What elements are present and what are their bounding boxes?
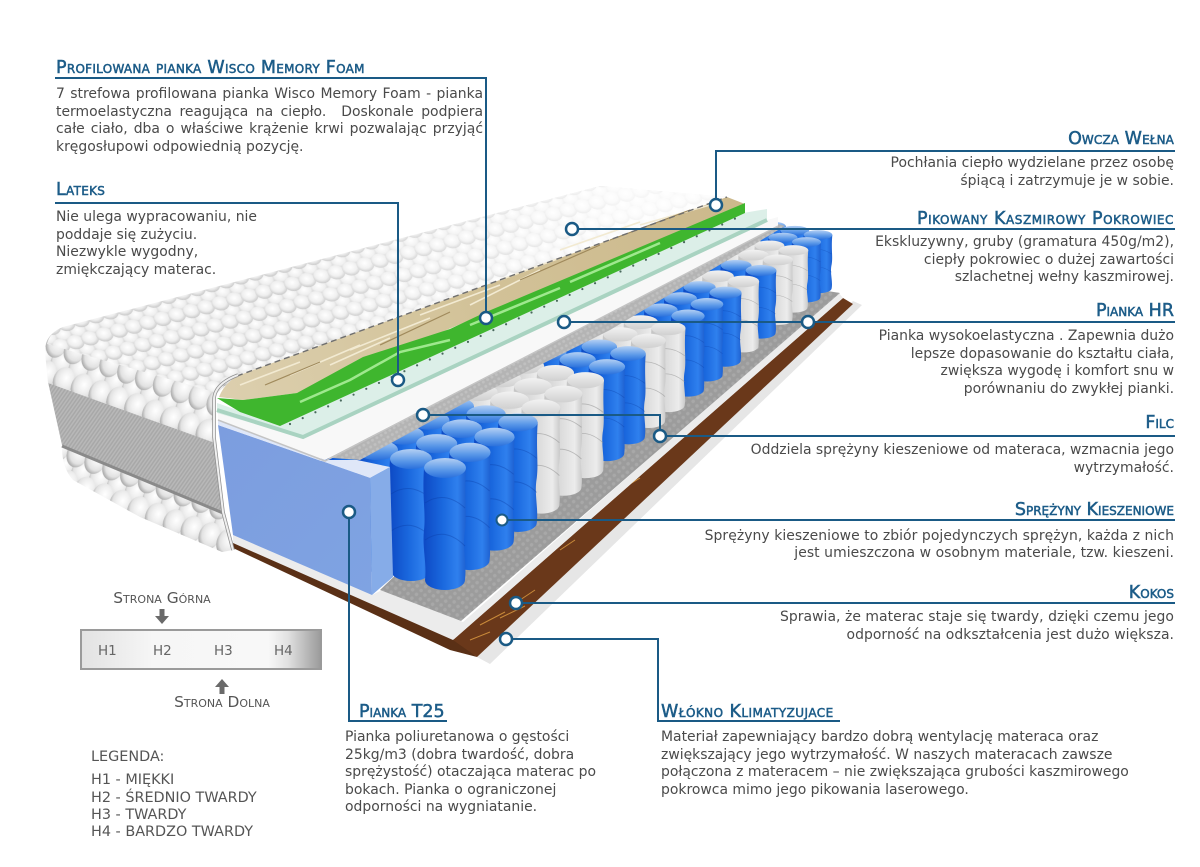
callout line: Profilowana pianka: [55, 78, 492, 324]
callout line: Pianka T25: [343, 506, 447, 721]
heading: Pianka HR: [1096, 301, 1174, 321]
description: pokrowca mimo jego pikowania laserowego.: [661, 782, 969, 798]
callout line: Filc: [417, 409, 1175, 442]
T25 foam: side face: [370, 467, 393, 595]
callout: Sprężyny Kieszeniowe: [705, 500, 1174, 561]
coconut layer: front lip: [233, 538, 477, 657]
legend entries: H4 - BARDZO TWARDY: [91, 824, 253, 840]
description: wytrzymałość.: [1074, 460, 1174, 476]
legend entries: H2 - ŚREDNIO TWARDY: [91, 790, 257, 806]
heading: Profilowana pianka Wisco Memory Foam: [56, 58, 365, 78]
description: jest umieszczona w osobnym materiale, tzw. kieszeni.: [794, 545, 1174, 561]
description: bokach. Pianka o ograniczonej: [345, 782, 556, 798]
legend title: LEGENDA:: [91, 749, 164, 765]
white fibre strip: [477, 301, 862, 664]
cover: quilted top surface: [47, 186, 727, 392]
heading: Sprężyny Kieszeniowe: [1015, 500, 1174, 520]
description: [345, 729, 596, 815]
grey knit base: [380, 289, 840, 621]
heading: Włókno Klimatyzujace: [661, 702, 834, 722]
heading: Pikowany Kaszmirowy Pokrowiec: [917, 209, 1174, 229]
cover: upper quilted side: [45, 327, 236, 443]
callout: Pianka HR: [879, 301, 1174, 397]
description: [780, 609, 1174, 643]
description: Pianka wysokoelastyczna . Zapewnia dużo: [879, 328, 1174, 344]
description: Sprawia, że materac staje się twardy, dzięki czemu jego: [780, 609, 1174, 625]
description: [879, 328, 1174, 397]
description: [891, 155, 1174, 189]
heading: Lateks: [56, 180, 105, 200]
H3: H3: [214, 643, 233, 659]
description: Nie ulega wypracowaniu, nie: [56, 209, 257, 225]
callout: Kokos: [780, 583, 1174, 643]
pocket springs: [321, 217, 832, 590]
description: porównaniu do zwykłej pianki.: [964, 381, 1174, 397]
description: [56, 86, 483, 155]
legend entries: H1 - MIĘKKI: [91, 772, 174, 788]
legend: [91, 749, 257, 840]
T25 foam: front face: [218, 425, 372, 595]
mattress illustration: [45, 186, 862, 664]
legend entries: H3 - TWARDY: [91, 807, 186, 823]
coconut layer: [453, 298, 853, 657]
description: termoelastyczna reagująca na ciepło. Doskonale podpiera: [56, 104, 483, 120]
callout line: Owcza Wełna: [710, 151, 1175, 211]
callout: Profilowana pianka Wisco Memory Foam: [56, 58, 483, 155]
H2: H2: [153, 643, 172, 659]
description: Oddziela sprężyny kieszeniowe od materaca, wzmacnia jego: [751, 442, 1174, 458]
description: [56, 209, 257, 278]
description: śpiącą i zatrzymuje je w sobie.: [960, 173, 1174, 189]
description: zmiękczający materac.: [56, 262, 216, 278]
description: lepsze dopasowanie do kształtu ciała,: [911, 346, 1174, 362]
white base strip: [233, 292, 843, 640]
arrow: bottom side: [215, 679, 229, 694]
description: 25kg/m3 (dobra twardość, dobra: [345, 747, 574, 763]
callout: Włókno Klimatyzujące: [661, 702, 1129, 798]
description: zwiększa wygodę i komfort snu w: [941, 363, 1174, 379]
label: Strona Dolna: Strona Dolna: [174, 693, 270, 711]
description: [705, 528, 1174, 561]
description: szlachetnej wełny kaszmirowej.: [955, 269, 1174, 285]
callout: Filc: [751, 413, 1174, 476]
description: 7 strefowa profilowana pianka Wisco Memory Foam - pianka: [56, 86, 483, 102]
top surface fade: [47, 186, 727, 392]
latex layer: [217, 209, 767, 438]
callout: Owcza Wełna: [891, 129, 1174, 189]
cover: lower quilted side: [62, 447, 233, 552]
callout: Pikowany Kaszmirowy Pokrowiec: [875, 209, 1174, 285]
callout line: Lateks: [55, 203, 404, 386]
callout line: Włókno Klimatyzujące: [500, 633, 840, 721]
description: Pianka poliuretanowa o gęstości: [345, 729, 569, 745]
heading: Owcza Wełna: [1068, 129, 1174, 149]
callout: Pianka T25: [345, 702, 596, 815]
callout line: Kokos: [510, 597, 1175, 609]
legend entries: [91, 772, 257, 840]
description: połączona z materacem – nie zwiększająca grubości kaszmirowego: [661, 764, 1129, 780]
H4: H4: [274, 643, 293, 659]
description: Materiał zapewniający bardzo dobrą wentylację materaca oraz: [661, 729, 1098, 745]
H1: H1: [98, 643, 117, 659]
firmness labels: [98, 643, 293, 659]
description: [661, 729, 1129, 798]
wool layer: [219, 197, 745, 400]
firmness bar: [81, 630, 321, 669]
heading: Pianka T25: [359, 702, 445, 722]
description: zwiększający jego wytrzymałość. W naszych materacach zawsze: [661, 747, 1112, 763]
cover: grey side band: [48, 382, 223, 512]
cover edge binding: [214, 375, 238, 550]
description: Sprężyny kieszeniowe to zbiór pojedynczych sprężyn, każda z nich: [705, 528, 1174, 544]
description: odporności na wygniatanie.: [345, 799, 537, 815]
description: [875, 234, 1174, 285]
cover edge stitching: [237, 197, 727, 376]
HR foam layer: [218, 217, 778, 461]
heading: Kokos: [1129, 583, 1174, 603]
description: Pochłania ciepło wydzielane przez osobę: [891, 155, 1174, 171]
callout: Lateks: [56, 180, 257, 278]
description: ciepły pokrowiec o dużej zawartości: [924, 252, 1174, 268]
description: sprężystość) otaczająca materac po: [345, 764, 596, 780]
arrow: top side: [155, 609, 169, 624]
description: odporność na odkształcenia jest dużo większa.: [847, 627, 1174, 643]
description: Ekskluzywny, gruby (gramatura 450g/m2),: [875, 234, 1174, 250]
label: Strona Górna: Strona Górna: [113, 589, 211, 607]
description: kręgosłupowi odpowiednią pozycję.: [56, 139, 303, 155]
green latex-gel layer: [217, 203, 745, 426]
callout line: Pikowany Kaszmirowy Pokrowiec: [566, 223, 1175, 235]
description: całe ciało, dba o właściwe krążenie krwi pozwalając przyjąć: [56, 121, 483, 137]
callout line: Sprężyny Kieszeniowe: [496, 514, 1175, 526]
callout line: Pianka HR: [558, 316, 1175, 328]
heading: Filc: [1145, 413, 1174, 433]
description: poddaje się zużyciu.: [56, 227, 197, 243]
cover: seam: [62, 446, 223, 513]
description: [751, 442, 1174, 476]
felt layer: [325, 224, 785, 460]
T25 foam: top face: [218, 420, 390, 478]
description: Niezwykle wygodny,: [56, 244, 198, 260]
